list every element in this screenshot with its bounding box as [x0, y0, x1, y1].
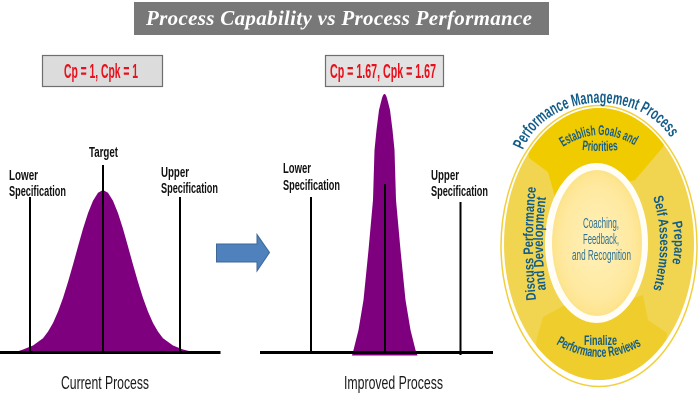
label: upper specification: Specification [431, 184, 488, 200]
target line [384, 184, 386, 353]
core white ring [545, 163, 648, 323]
label: lower specification: Lower [283, 161, 311, 177]
arrow: current to improved [216, 234, 270, 271]
bell curve fill [16, 190, 193, 352]
callout: current process indices [42, 56, 162, 86]
wheel title: Performance Management Process [512, 93, 677, 150]
segment: finalize reviews [536, 295, 667, 380]
baseline axis [260, 351, 493, 354]
panel: performance management process wheel [500, 93, 698, 388]
lower specification line [29, 197, 31, 353]
centre text: and Recognition [572, 247, 631, 264]
lower specification line [310, 197, 312, 353]
centre text: Coaching, [583, 215, 619, 232]
upper specification line [460, 202, 462, 355]
label: discuss performance: Discuss Performance [522, 187, 536, 300]
caption: improved process: Improved Process [344, 373, 443, 393]
label: performance reviews: Performance Reviews [556, 336, 640, 358]
label: lower specification: Lower [9, 168, 38, 184]
label: prepare: Prepare [672, 220, 682, 264]
label: priorities: Priorities [582, 140, 618, 152]
label: finalize: Finalize [584, 332, 617, 348]
core centre [552, 170, 642, 316]
label: and development: and Development [532, 196, 546, 290]
label: establish goals: Establish Goals and [558, 125, 640, 147]
target line [102, 165, 104, 353]
label: target: Target [89, 145, 118, 161]
label: lower specification: Specification [283, 178, 340, 194]
label: self assessments: Self Assessments [654, 196, 668, 291]
callout: current process indices: Cp = 1, Cpk = 1 [64, 61, 138, 83]
title banner: Process Capability vs Process Performance [145, 6, 532, 30]
main ring [504, 108, 694, 380]
outer thin ring [501, 106, 697, 386]
caption: current process: Current Process [61, 373, 149, 393]
callout: improved process indices [326, 56, 444, 86]
label: upper specification: Upper [161, 165, 189, 181]
chart: improved process bell curve [260, 94, 493, 393]
label: upper specification: Upper [431, 168, 459, 184]
chart: current process bell curve [0, 145, 220, 393]
callout: improved process indices: Cp = 1.67, Cpk = 1.67 [330, 61, 436, 83]
centre text: Feedback, [583, 231, 619, 248]
baseline axis [0, 351, 220, 354]
label: upper specification: Specification [161, 181, 218, 197]
label: lower specification: Specification [9, 184, 66, 200]
narrow curve fill [352, 94, 418, 356]
upper specification line [179, 197, 181, 353]
title banner [134, 2, 549, 35]
segment: establish goals [528, 108, 664, 196]
